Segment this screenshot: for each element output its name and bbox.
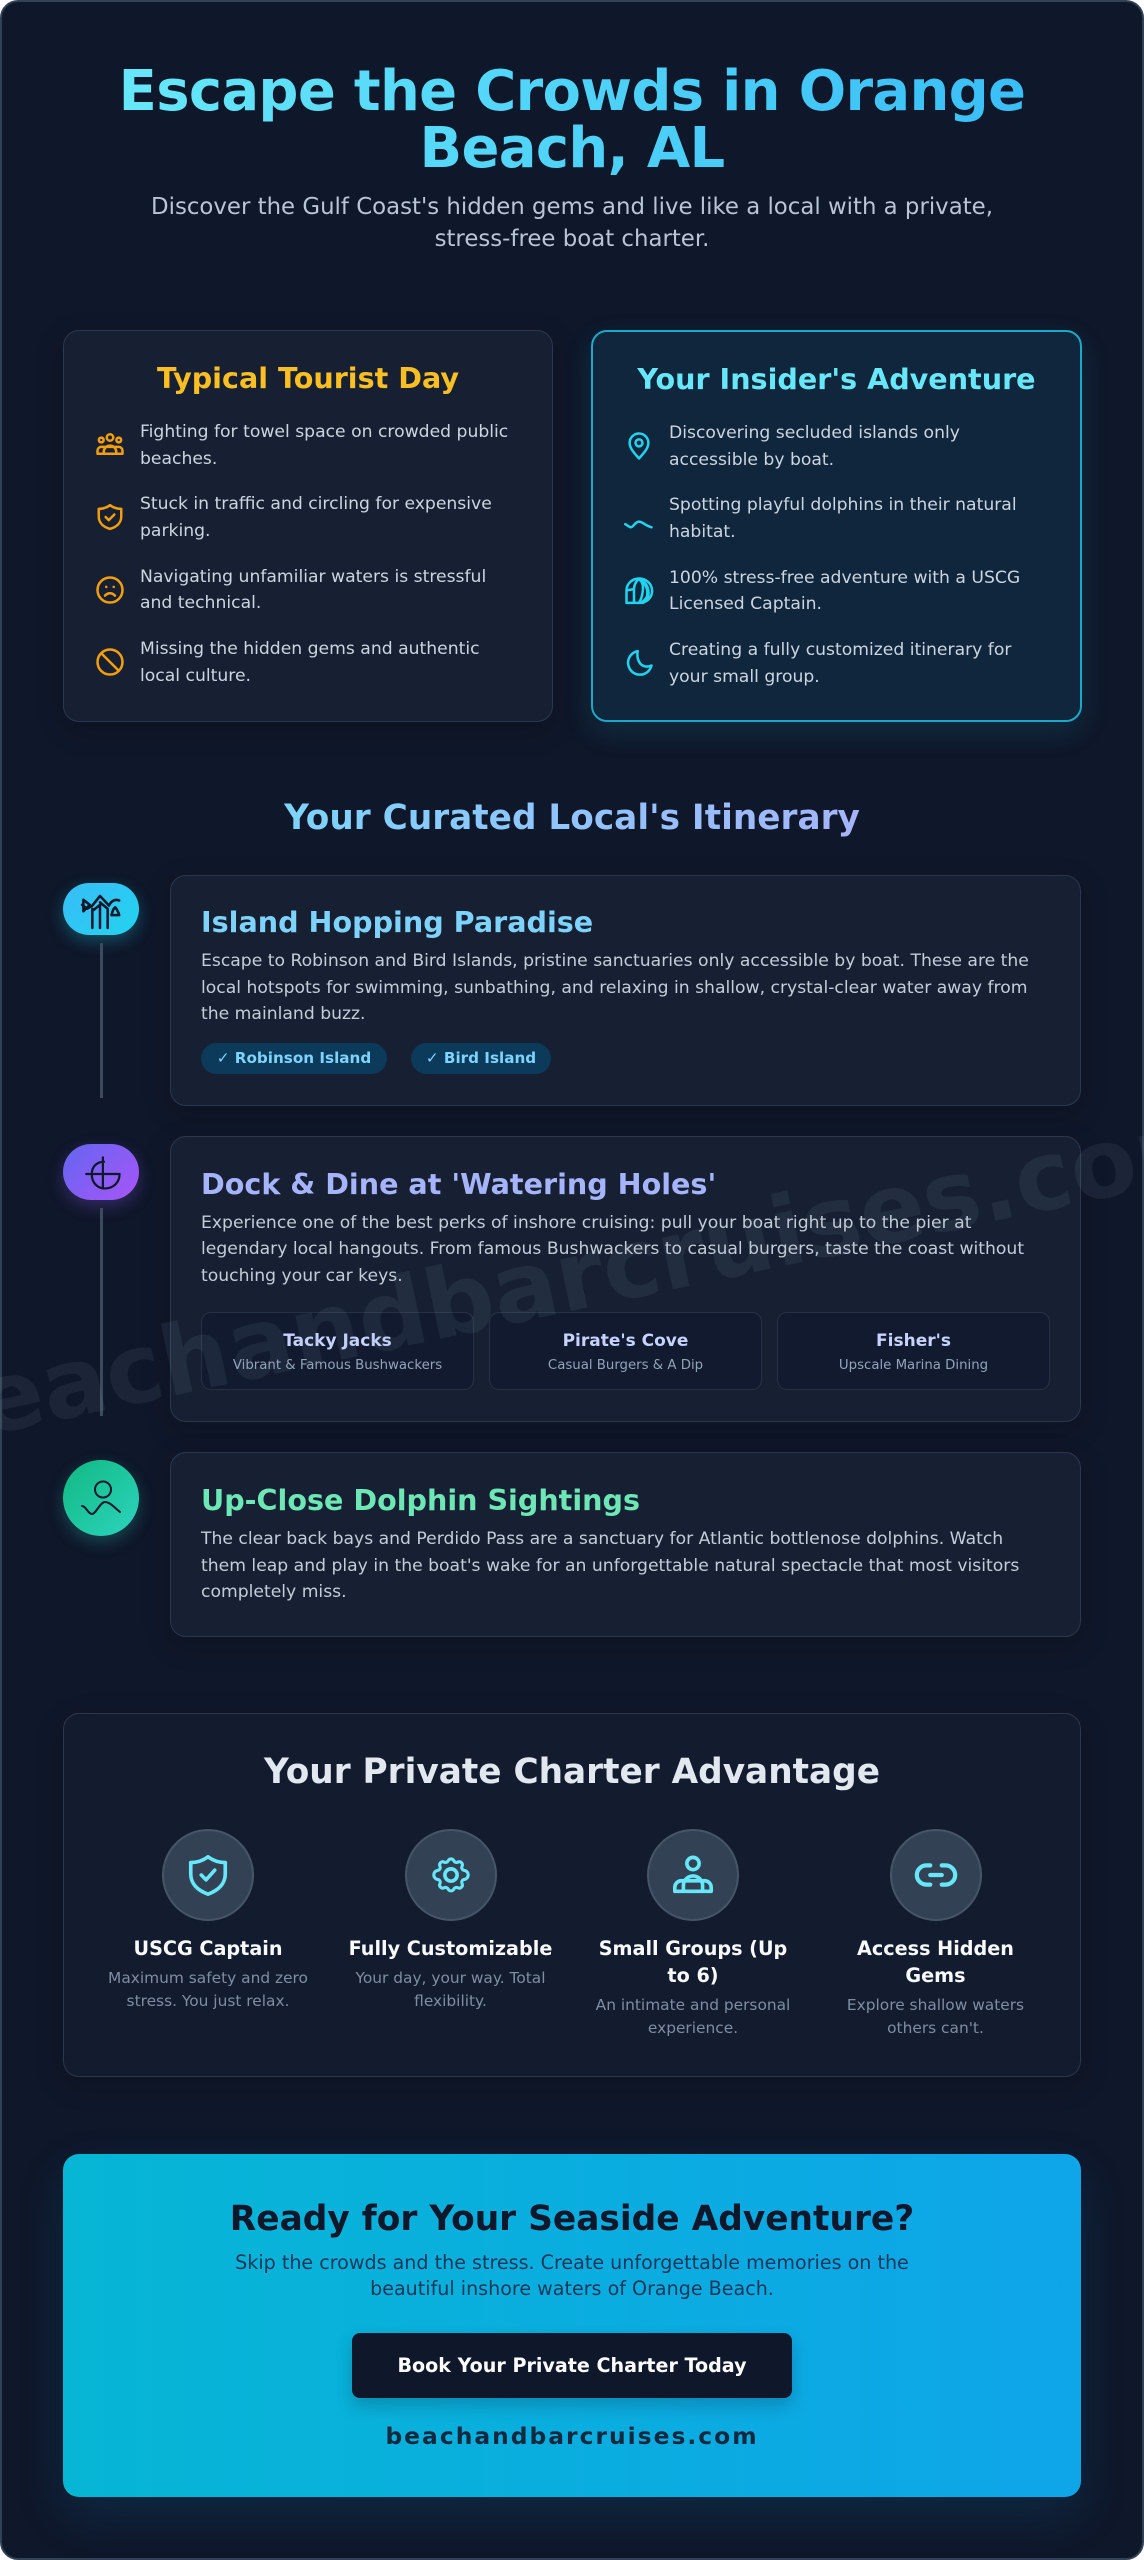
list item: itinerary <box>669 640 1012 687</box>
description: experience. <box>648 2019 738 2037</box>
heading: insider adventure: Your Insider's Adventure <box>637 362 1036 396</box>
timeline icon: dolphin <box>63 1460 139 1536</box>
advantage: Small Groups <box>596 1829 790 2037</box>
list item: unfamiliar waters: Navigating unfamiliar waters is stressful <box>140 567 486 587</box>
title: USCG Captain <box>133 1937 283 1960</box>
description: Maximum safety and zero <box>108 1969 308 1987</box>
chip: Bird Island: ✓ Bird Island <box>426 1049 536 1067</box>
text: dolphin sightings: completely miss. <box>201 1582 347 1602</box>
list item: towel space: beaches. <box>140 449 217 469</box>
description: Your day, your way. Total <box>356 1969 546 1987</box>
description: stress. You just relax. <box>127 1992 289 2010</box>
card: island hopping <box>170 875 1081 1106</box>
website: beachandbarcruises.com <box>385 2422 759 2450</box>
text: island hopping: the mainland buzz. <box>201 1004 366 1024</box>
subtitle: Discover the Gulf Coast's hidden gems and live like a local with a private, <box>151 194 993 220</box>
panel: typical tourist day <box>63 330 553 722</box>
list item: traffic <box>140 494 492 541</box>
icon: link <box>890 1829 982 1921</box>
description: others can't. <box>887 2019 984 2037</box>
list item: traffic: parking. <box>140 521 211 541</box>
timeline connector 2 <box>100 1208 102 1416</box>
text: call to action: Skip the crowds and the stress. Create unforgettable memories on the <box>235 2250 909 2274</box>
text: island hopping <box>201 951 1029 1024</box>
title <box>599 1937 787 1987</box>
button: book charter <box>352 2333 792 2398</box>
list item: captain: 100% stress-free adventure with a USCG <box>669 568 1020 588</box>
icon: ban <box>96 648 124 676</box>
list item: traffic: Stuck in traffic and circling for expensive <box>140 494 492 514</box>
venue: Pirate's Cove: Casual Burgers & A Dip <box>548 1358 703 1373</box>
title: Beach, AL <box>419 116 724 181</box>
icon: map pin <box>628 432 650 460</box>
title: Fully Customizable <box>349 1937 552 1960</box>
subtitle: stress-free boat charter. <box>435 226 709 252</box>
list item: dolphins: Spotting playful dolphins in their natural <box>669 495 1017 515</box>
title: Access Hidden <box>857 1937 1014 1960</box>
list item: islands: Discovering secluded islands only <box>669 423 960 443</box>
heading: island hopping: Island Hopping Paradise <box>201 905 593 939</box>
text: dock and dine: touching your car keys. <box>201 1266 403 1286</box>
description <box>356 1969 546 2010</box>
advantage: USCG Captain <box>108 1829 308 2010</box>
chip: Robinson Island: ✓ Robinson Island <box>217 1049 371 1067</box>
title <box>110 63 1034 177</box>
icon: shield check <box>98 504 122 530</box>
list item: unfamiliar waters <box>140 567 486 613</box>
icon: moon <box>626 650 653 676</box>
venue: Fisher's: Fisher's <box>876 1331 951 1351</box>
timeline icon: island <box>63 883 139 935</box>
text: island hopping: local hotspots for swimming, sunbathing, and relaxing in shallow, crystal-clear water away from <box>201 978 1027 998</box>
title: Gems <box>905 1964 966 1987</box>
button: book charter: Book Your Private Charter Today <box>397 2354 747 2377</box>
venue: Fisher's <box>777 1312 1050 1390</box>
venue: Pirate's Cove: Pirate's Cove <box>563 1331 688 1351</box>
advantage: Hidden Gems <box>847 1829 1024 2037</box>
description: An intimate and personal <box>596 1996 790 2014</box>
heading: dolphin sightings: Up-Close Dolphin Sightings <box>201 1483 640 1517</box>
chip: Bird Island <box>411 1043 551 1074</box>
list item: unfamiliar waters: and technical. <box>140 593 261 613</box>
list item: captain <box>669 568 1020 614</box>
card: dock and dine <box>170 1136 1081 1422</box>
heading: typical tourist day: Typical Tourist Day <box>157 361 459 395</box>
icon: sail <box>625 577 654 604</box>
title: Small Groups (Up <box>599 1937 787 1960</box>
list item: islands: accessible by boat. <box>669 450 834 470</box>
heading: charter advantage: Your Private Charter Advantage <box>264 1752 880 1792</box>
list item: hidden gems: Missing the hidden gems and authentic <box>140 639 480 659</box>
text: dolphin sightings: them leap and play in the boat's wake for an unforgettable natural spectacle that most visitors <box>201 1556 1019 1576</box>
list item: towel space: Fighting for towel space on crowded public <box>140 422 508 442</box>
timeline connector 1 <box>100 943 102 1098</box>
text: call to action <box>235 2250 909 2300</box>
title: Escape the Crowds in Orange <box>119 59 1025 124</box>
card: dolphin sightings <box>170 1452 1081 1637</box>
heading: dock and dine: Dock & Dine at 'Watering Holes' <box>201 1167 716 1201</box>
text: dolphin sightings: The clear back bays and Perdido Pass are a sanctuary for Atlantic bottlenose dolphins. Watch <box>201 1529 1003 1549</box>
text: dock and dine: Experience one of the best perks of inshore cruising: pull your boat right up to the pier at <box>201 1212 971 1232</box>
description <box>596 1996 790 2037</box>
list item: dolphins: habitat. <box>669 522 736 542</box>
list item: hidden gems: local culture. <box>140 666 251 686</box>
list item: dolphins <box>669 495 1017 542</box>
icon: crowd <box>96 433 124 455</box>
heading: call to action: Ready for Your Seaside Adventure? <box>230 2198 914 2238</box>
text: dock and dine <box>201 1212 1024 1286</box>
text: call to action: beautiful inshore waters of Orange Beach. <box>370 2277 774 2300</box>
venue: Pirate's Cove <box>489 1312 762 1390</box>
panel: charter advantage <box>63 1713 1081 2077</box>
title <box>857 1937 1014 1987</box>
description: Explore shallow waters <box>847 1996 1024 2014</box>
icon: group <box>647 1829 739 1921</box>
icon: gear <box>404 1829 496 1921</box>
description <box>108 1969 308 2010</box>
text: dolphin sightings <box>200 1529 1019 1602</box>
venue: Tacky Jacks <box>201 1312 474 1390</box>
icon: sad face <box>96 576 124 604</box>
venue: Tacky Jacks: Tacky Jacks <box>283 1331 392 1351</box>
text: dock and dine: legendary local hangouts. From famous Bushwackers to casual burgers, taste the coast without <box>201 1239 1024 1259</box>
advantage: Fully Customizable <box>349 1829 552 2010</box>
text: island hopping: Escape to Robinson and Bird Islands, pristine sanctuaries only accessible by boat. These are the <box>201 951 1029 971</box>
venue: Fisher's: Upscale Marina Dining <box>839 1358 988 1373</box>
timeline icon: dock and dine <box>63 1144 139 1200</box>
venue: Tacky Jacks: Vibrant & Famous Bushwackers <box>233 1358 442 1373</box>
list item: towel space <box>140 422 508 469</box>
description <box>847 1996 1024 2037</box>
title: to 6) <box>667 1964 719 1987</box>
list item: hidden gems <box>140 639 480 686</box>
description: flexibility. <box>414 1992 487 2010</box>
heading: curated itinerary: Your Curated Local's Itinerary <box>284 798 860 838</box>
list item: itinerary: Creating a fully customized itinerary for <box>669 640 1011 660</box>
chip: Robinson Island <box>201 1043 387 1074</box>
list item: itinerary: your small group. <box>669 667 820 687</box>
icon: shield <box>162 1829 254 1921</box>
list item: islands <box>669 423 960 470</box>
icon: wave <box>624 520 653 528</box>
panel: insider adventure <box>591 330 1082 722</box>
list item: captain: Licensed Captain. <box>669 594 822 614</box>
subtitle <box>151 194 993 252</box>
panel: call to action <box>63 2154 1081 2497</box>
